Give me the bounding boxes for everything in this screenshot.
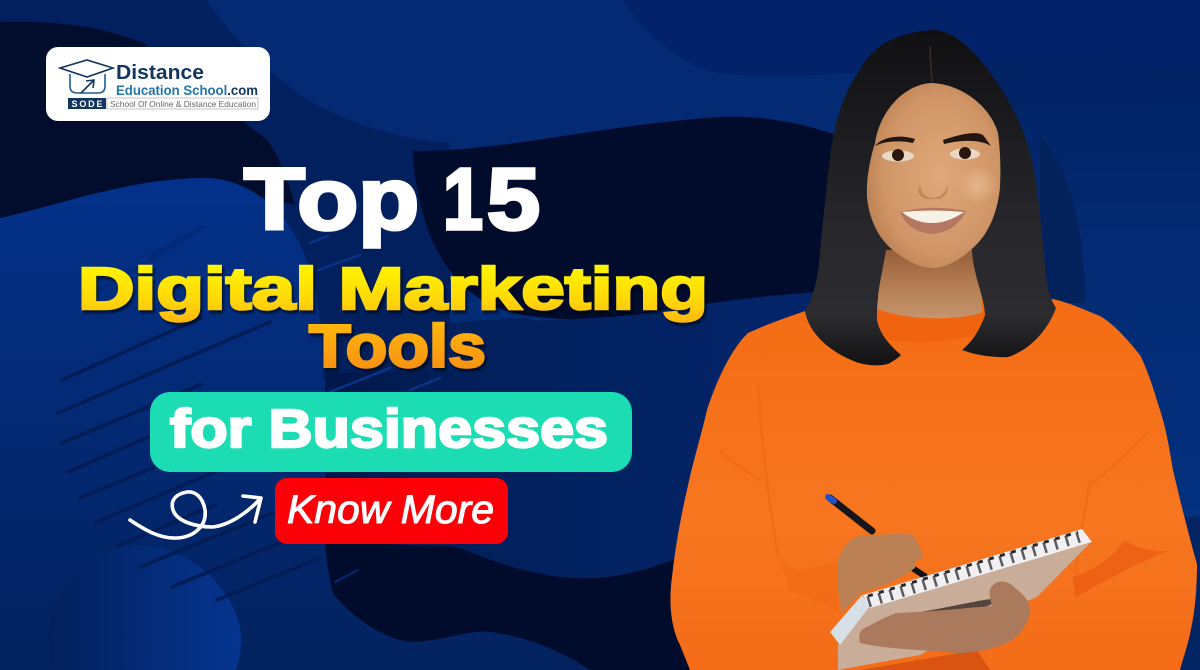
icon: graduation cap — [60, 60, 113, 93]
title: Top 15: 5 — [487, 151, 540, 248]
title: Top 15: 1 — [443, 151, 483, 248]
eyebrows — [875, 133, 991, 146]
central dark shape — [413, 117, 850, 319]
navy band below dark shape — [620, 291, 850, 340]
white spine strip — [863, 529, 1092, 608]
decorative diagonal lines — [58, 226, 330, 600]
dark shape top-left — [0, 22, 295, 225]
title: Top 15: Top — [244, 151, 419, 248]
sweater — [670, 296, 1197, 670]
sweater dark under hand — [860, 650, 990, 670]
nose — [918, 185, 948, 199]
sleeve shadows — [1073, 540, 1167, 598]
logo wordmark: Distance — [116, 62, 204, 84]
cover — [838, 543, 1090, 670]
logo card — [46, 47, 270, 121]
arrow: curly — [130, 492, 261, 538]
title: Top 15 — [244, 151, 540, 248]
spiral binding — [868, 535, 1086, 602]
holding hand — [859, 582, 1030, 653]
lobe behind hair — [1040, 137, 1085, 303]
collar — [876, 308, 984, 343]
face — [867, 83, 1000, 268]
sweater shading — [720, 385, 1150, 575]
pill: for Businesses — [150, 392, 632, 472]
logo SODE tag: SODE — [72, 99, 102, 109]
neck — [878, 240, 982, 326]
hair — [805, 30, 1056, 365]
pen — [828, 497, 926, 577]
pill: for Businesses: for Businesses — [170, 399, 608, 459]
button: Know More: Know More — [287, 488, 494, 532]
notebook — [830, 529, 1092, 670]
title: Tools: Tools — [309, 313, 486, 380]
title: Digital Marketing: Digital Marketing — [78, 256, 708, 322]
lower dark shape — [325, 540, 760, 670]
smile — [900, 208, 966, 234]
eyes — [882, 147, 980, 162]
middle navy shape — [325, 312, 760, 578]
cheek highlight — [958, 165, 998, 205]
button: Know More — [275, 478, 508, 544]
hair part — [930, 46, 932, 82]
pages edge — [830, 595, 870, 645]
notebook shadow — [900, 598, 1000, 616]
person — [670, 30, 1197, 670]
writing hand — [837, 534, 923, 613]
logo SODE tag: School Of Online & Distance Education — [110, 99, 256, 109]
circle bottom-left — [48, 545, 241, 670]
blue blob left — [0, 178, 590, 670]
logo subtitle: Education School.com — [116, 82, 258, 98]
